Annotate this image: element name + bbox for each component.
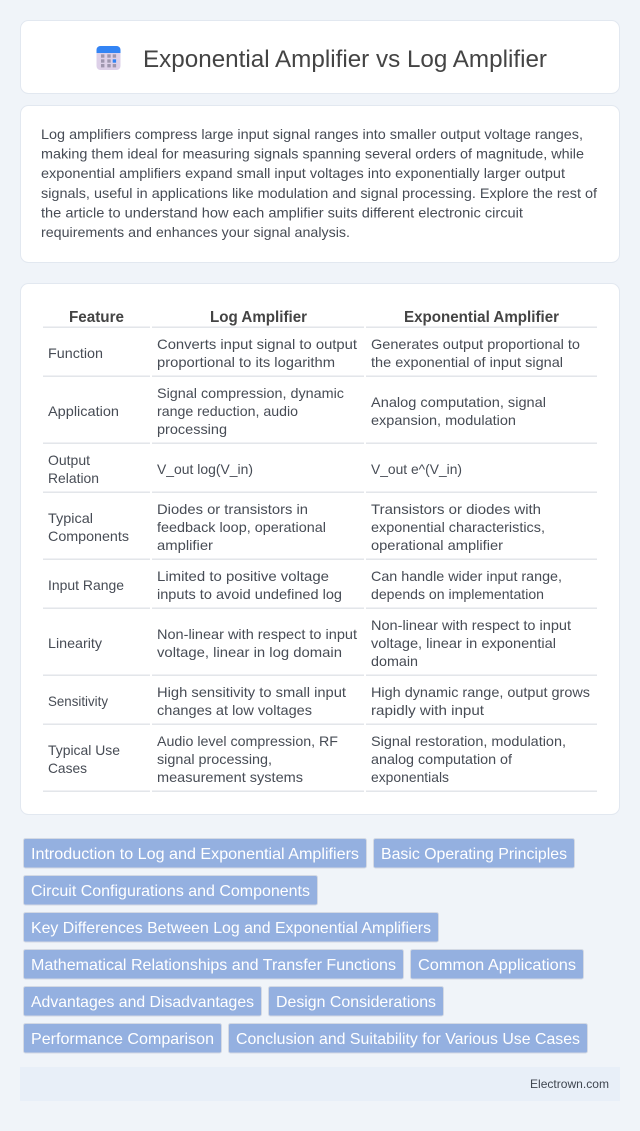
row: Sensitivity: rapidly with input — [371, 702, 484, 718]
row: Sensitivity: High dynamic range, output grows — [371, 684, 590, 700]
table header row: Feature — [69, 309, 124, 326]
row: Typical Components: Transistors or diodes with — [371, 501, 541, 517]
tag: Circuit Configurations: Circuit Configurations and Components — [31, 883, 310, 900]
row: Application: Signal compression, dynamic — [157, 385, 344, 401]
tag: Advantages and Disadvantages: Advantages and Disadvantages — [31, 994, 254, 1011]
row: Output Relation: Output — [48, 452, 90, 468]
row: Input Range: inputs to avoid undefined log — [157, 586, 342, 602]
row: Typical Use Cases: Signal restoration, modulation, — [371, 733, 566, 749]
tag: Mathematical Relationships — [24, 950, 404, 979]
row: Typical Components: Typical — [48, 510, 93, 526]
row: Typical Components: feedback loop, operational — [157, 519, 326, 535]
tag: Performance Comparison — [24, 1024, 222, 1053]
row: Function: Generates output proportional to — [371, 336, 580, 352]
row: Application: range reduction, audio — [157, 403, 298, 419]
tag: Performance Comparison: Performance Comparison — [31, 1031, 214, 1048]
tag: Common Applications: Common Applications — [418, 957, 576, 974]
row: Typical Use Cases: exponentials — [371, 769, 449, 785]
row: Typical Use Cases: Audio level compression, RF — [157, 733, 338, 749]
row: Typical Use Cases: Typical Use — [48, 742, 120, 758]
intro text: exponential amplifiers expand small input voltages into exponentially larger output — [41, 165, 565, 181]
tag: Introduction — [24, 838, 366, 868]
row: Application: Analog computation, signal — [371, 394, 546, 410]
row: Typical Use Cases: analog computation of — [371, 751, 512, 767]
row: Application: Application — [48, 403, 119, 419]
row: Sensitivity: High sensitivity to small input — [157, 684, 346, 700]
tag: Circuit Configurations — [24, 876, 318, 905]
row: Function: proportional to its logarithm — [157, 354, 335, 370]
row: Typical Use Cases: Cases — [48, 760, 87, 776]
row: Typical Components: Diodes or transistors in — [157, 501, 308, 517]
table header row: Exponential Amplifier — [404, 309, 559, 326]
intro text — [41, 126, 597, 240]
row: Output Relation: V_out log(V_in) — [157, 461, 253, 477]
row: Input Range: depends on implementation — [371, 586, 544, 602]
row: Typical Components: exponential characteristics, — [371, 519, 545, 535]
tag: Advantages and Disadvantages — [24, 986, 262, 1016]
row: Typical Components: amplifier — [157, 537, 213, 553]
row: Input Range — [43, 568, 597, 609]
row: Typical Components — [43, 501, 597, 560]
tag: Key Differences: Key Differences Between Log and Exponential Amplifiers — [31, 920, 431, 937]
row: Linearity: domain — [371, 653, 418, 669]
row: Linearity: voltage, linear in log domain — [157, 644, 342, 660]
row: Linearity: Linearity — [48, 635, 102, 651]
row: Input Range: Can handle wider input range, — [371, 568, 562, 584]
row: Input Range: Input Range — [48, 577, 124, 593]
row: Typical Components: operational amplifier — [371, 537, 503, 553]
row: Output Relation: Relation — [48, 470, 99, 486]
table header row — [43, 309, 597, 328]
footer: Electrown.com — [530, 1077, 609, 1091]
row: Sensitivity: changes at low voltages — [157, 702, 312, 718]
icon: calendar grid — [96, 46, 120, 70]
topic tags — [24, 838, 588, 1053]
intro text: making them ideal for measuring signals spanning several orders of magnitude, while — [41, 146, 584, 162]
row: Linearity — [43, 617, 597, 676]
tag: Common Applications — [410, 950, 584, 979]
row: Linearity: Non-linear with respect to input — [157, 626, 357, 642]
tag: Basic Operating Principles — [374, 838, 574, 868]
panel: intro paragraph — [20, 106, 620, 262]
tag: Key Differences — [24, 912, 438, 942]
tag: Basic Operating Principles: Basic Operating Principles — [381, 846, 567, 863]
row: Function: Function — [48, 345, 103, 361]
row: Application: processing — [157, 421, 227, 437]
footer — [20, 1067, 620, 1101]
row: Function: the exponential of input signal — [371, 354, 563, 370]
row: Typical Use Cases: signal processing, — [157, 751, 272, 767]
tag: Design Considerations: Design Considerations — [276, 994, 436, 1011]
tag: Design Considerations — [268, 986, 444, 1016]
panel: title header — [20, 20, 620, 94]
title: Exponential Amplifier vs Log Amplifier — [143, 46, 547, 73]
row: Output Relation — [43, 452, 597, 493]
intro text: signals, useful in applications like modulation and signal processing. Explore the rest of — [41, 185, 597, 201]
row: Input Range: Limited to positive voltage — [157, 568, 329, 584]
row: Application — [43, 385, 597, 444]
row: Typical Components: Components — [48, 528, 129, 544]
tag: Conclusion: Conclusion and Suitability for Various Use Cases — [236, 1031, 580, 1048]
row: Linearity: voltage, linear in exponential — [371, 635, 556, 651]
row: Typical Use Cases — [43, 733, 597, 792]
intro text: the article to understand how each amplifier suits different electronic circuit — [41, 204, 523, 220]
row: Application: expansion, modulation — [371, 412, 516, 428]
row: Typical Use Cases: measurement systems — [157, 769, 303, 785]
row: Sensitivity: Sensitivity — [48, 693, 108, 709]
tag: Conclusion — [228, 1024, 588, 1053]
row: Output Relation: V_out e^(V_in) — [371, 461, 462, 477]
row: Function: Converts input signal to output — [157, 336, 357, 352]
row: Function — [43, 336, 597, 377]
intro text: requirements and enhances your signal analysis. — [41, 224, 350, 240]
tag: Mathematical Relationships: Mathematical Relationships and Transfer Functions — [31, 957, 396, 974]
intro text: Log amplifiers compress large input signal ranges into smaller output voltage ranges, — [41, 126, 583, 142]
panel: comparison table — [20, 284, 620, 814]
table header row: Log Amplifier — [210, 309, 307, 326]
tag: Introduction: Introduction to Log and Exponential Amplifiers — [31, 846, 359, 863]
row: Linearity: Non-linear with respect to input — [371, 617, 571, 633]
row: Sensitivity — [43, 684, 597, 725]
